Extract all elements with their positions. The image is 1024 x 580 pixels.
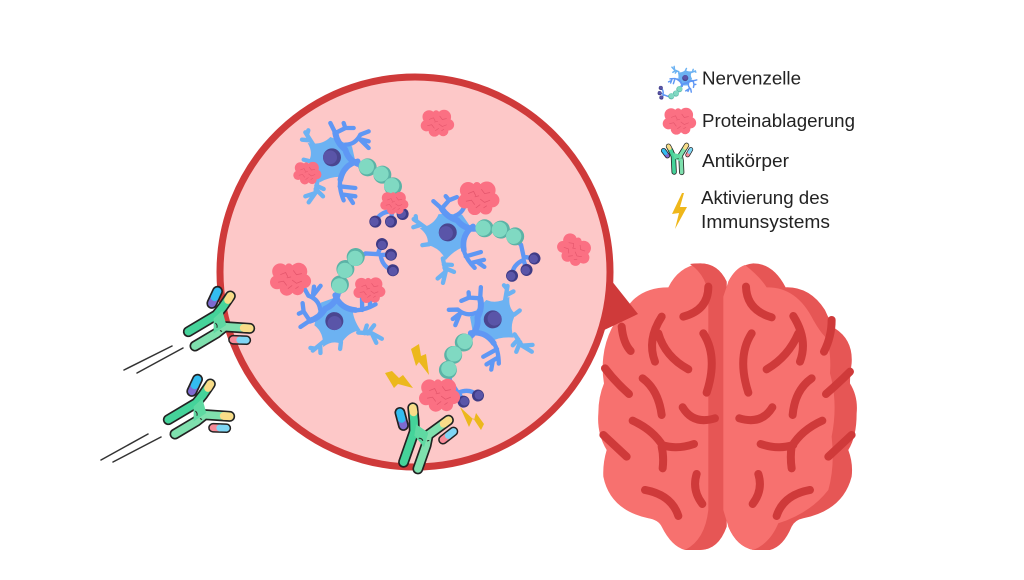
neuron: top left bbox=[302, 123, 409, 228]
neuron: lower right bbox=[409, 276, 548, 414]
magnified circle bbox=[220, 77, 610, 467]
motion lines bbox=[101, 346, 183, 462]
label: Antikörper: Antikörper bbox=[702, 151, 789, 171]
antibody: entering circle bbox=[188, 291, 250, 346]
label: Nervenzelle: Nervenzelle bbox=[702, 68, 801, 88]
icon: neuron bbox=[656, 63, 699, 106]
antibody: approaching bbox=[168, 379, 230, 434]
icon: protein deposit bbox=[663, 108, 696, 135]
pointer from magnified circle to brain bbox=[600, 280, 638, 332]
label: Aktivierung des Immunsystems: Aktivierung des bbox=[701, 188, 829, 208]
icon: antibody bbox=[657, 137, 694, 175]
label: Proteinablagerung: Proteinablagerung bbox=[702, 111, 855, 131]
neuron: centre right bbox=[407, 172, 545, 309]
icon: lightning bolt bbox=[672, 193, 687, 229]
label: Aktivierung des Immunsystems: Immunsystems bbox=[701, 212, 830, 232]
neuron: lower left bbox=[291, 236, 408, 355]
antibody: binding to protein bbox=[378, 392, 460, 473]
legend bbox=[656, 63, 855, 232]
brain bbox=[598, 263, 857, 550]
protein deposits bbox=[270, 110, 596, 412]
lightning bolts bbox=[385, 344, 484, 430]
